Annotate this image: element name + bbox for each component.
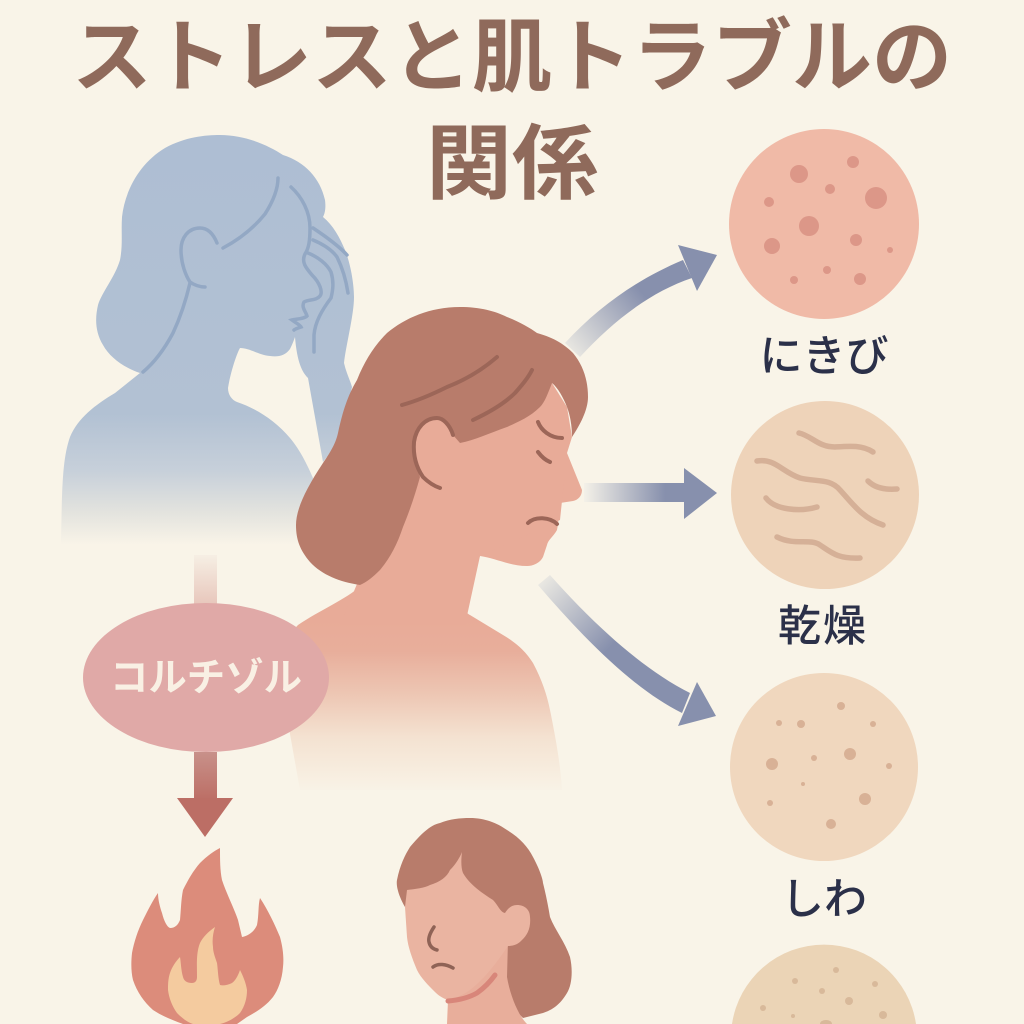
arrow: stem to cortisol	[194, 555, 217, 605]
figure: woman with closed eyes	[275, 307, 588, 790]
figure: stressed woman in blue	[61, 135, 354, 545]
title	[72, 13, 952, 210]
cortisol ellipse	[83, 603, 329, 752]
skin: acne	[729, 129, 919, 319]
label: acne: にきび	[760, 333, 888, 381]
figure: small woman	[397, 818, 572, 1024]
skin: bottom circle	[732, 945, 916, 1024]
arrow: to acne	[565, 245, 717, 357]
arrow: to dryness	[584, 468, 717, 519]
skin: wrinkles	[730, 673, 918, 861]
title: ストレスと肌トラブルの	[72, 13, 952, 102]
cortisol ellipse: コルチゾル	[110, 657, 302, 700]
label: dryness: 乾燥	[778, 603, 868, 651]
arrow: to wrinkles	[538, 575, 716, 726]
arrow: cortisol to flame	[177, 752, 233, 837]
icon: flame	[131, 848, 283, 1024]
skin: dryness	[731, 401, 919, 589]
label: wrinkles: しわ	[781, 876, 867, 924]
title: 関係	[426, 119, 598, 210]
